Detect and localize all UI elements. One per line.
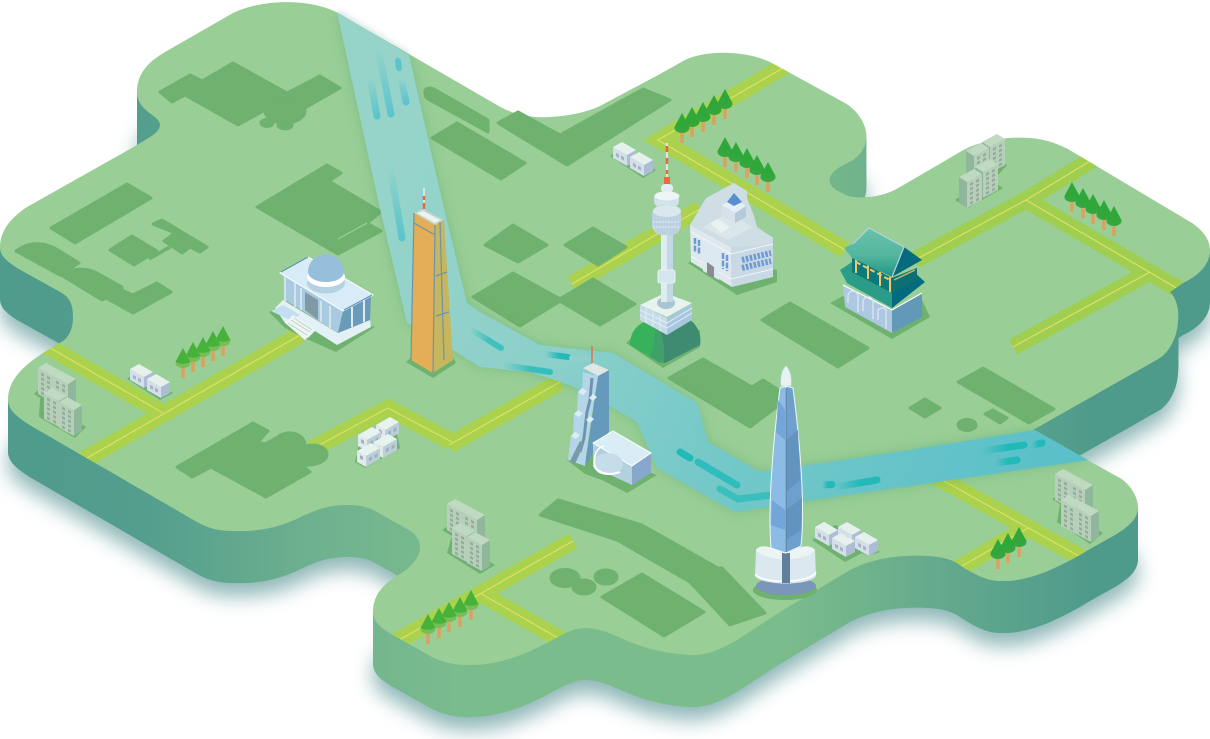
landmark: Lotte tower [753, 366, 817, 600]
small houses: north [610, 142, 656, 178]
river [337, 12, 1088, 512]
landmark: N Seoul tower on hill [626, 143, 701, 368]
apartments: southeast [1052, 469, 1103, 544]
landmark: government building [688, 183, 777, 295]
landmark: river-side tower with low annex [567, 346, 657, 493]
small houses: centre [355, 417, 400, 468]
apartments: south centre [442, 499, 495, 574]
trees: south row [420, 590, 478, 644]
small houses: southeast [812, 522, 880, 562]
park and block shapes [16, 63, 1054, 636]
trees: upper road [674, 89, 732, 143]
river current streaks [370, 47, 1042, 499]
apartments: west [34, 363, 86, 438]
trees: southeast row [990, 527, 1026, 569]
roads [40, 60, 1190, 648]
apartments: northeast [955, 134, 1007, 208]
landmark: traditional palace gate [830, 228, 930, 339]
landmark: domed assembly hall [269, 254, 375, 352]
trees: west row [176, 326, 230, 378]
small houses: west [127, 364, 173, 400]
trees: centre row [718, 137, 776, 192]
landmark: golden 63 tower [406, 188, 456, 378]
trees: east row [1064, 182, 1122, 236]
